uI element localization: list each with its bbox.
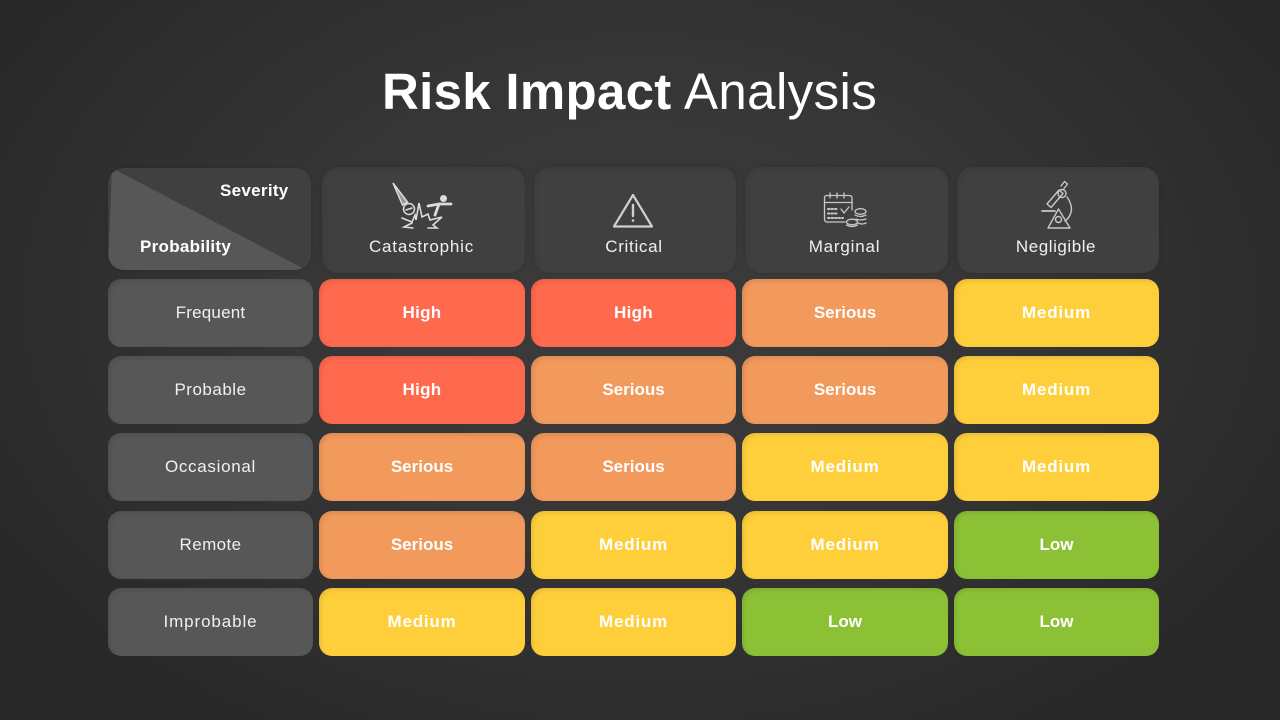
- column header: critical: Critical: [605, 237, 663, 256]
- cell: remote marginal: Medium: [810, 535, 880, 554]
- icon: warning triangle: [612, 194, 654, 228]
- column header: negligible: Negligible: [1016, 237, 1096, 256]
- cell: occasional catastrophic: [319, 433, 525, 501]
- title bold part: Risk Impact: [382, 63, 672, 120]
- cell: occasional marginal: [742, 433, 948, 501]
- cell: frequent critical: High: [614, 303, 653, 322]
- cell: probable negligible: [954, 356, 1159, 424]
- cell: improbable catastrophic: [319, 588, 525, 656]
- cell: probable negligible: Medium: [1022, 380, 1091, 399]
- cell: remote negligible: [954, 511, 1159, 579]
- column header: catastrophic: [322, 167, 525, 273]
- cell: improbable negligible: [954, 588, 1159, 656]
- icon: explosion and falling person: [392, 182, 452, 229]
- column header: critical: [534, 167, 736, 273]
- cell: improbable critical: [531, 588, 736, 656]
- cell: improbable marginal: Low: [828, 612, 862, 631]
- row: improbable: [108, 588, 313, 656]
- title: [382, 63, 877, 120]
- cell: frequent negligible: [954, 279, 1159, 347]
- icon: microscope: [1041, 180, 1072, 229]
- cell: probable catastrophic: [319, 356, 525, 424]
- panel: risk matrix: [108, 167, 1159, 656]
- row: remote: [108, 511, 313, 579]
- cell: frequent marginal: Serious: [814, 303, 876, 322]
- row: frequent: Frequent: [176, 303, 245, 322]
- row: remote: Remote: [180, 535, 241, 554]
- cell: frequent negligible: Medium: [1022, 303, 1091, 322]
- corner header: severity and probability: [108, 168, 311, 270]
- cell: occasional critical: Serious: [602, 457, 665, 476]
- cell: probable critical: [531, 356, 736, 424]
- cell: remote critical: Medium: [599, 535, 668, 554]
- cell: occasional critical: [531, 433, 736, 501]
- row: probable: [108, 356, 313, 424]
- cell: improbable catastrophic: Medium: [387, 612, 457, 631]
- cell: remote negligible: Low: [1040, 535, 1074, 554]
- cell: probable critical: Serious: [602, 380, 665, 399]
- cell: occasional catastrophic: Serious: [391, 457, 453, 476]
- cell: remote catastrophic: [319, 511, 525, 579]
- row: occasional: Occasional: [165, 457, 256, 476]
- corner header: severity and probability: Severity: [220, 181, 289, 200]
- cell: remote critical: [531, 511, 736, 579]
- row: frequent: [108, 279, 313, 347]
- cell: occasional marginal: Medium: [810, 457, 880, 476]
- cell: improbable marginal: [742, 588, 948, 656]
- row: occasional: [108, 433, 313, 501]
- column header: marginal: Marginal: [809, 237, 880, 256]
- cell: frequent catastrophic: [319, 279, 525, 347]
- icon: calendar and coins: [824, 192, 867, 228]
- cell: frequent marginal: [742, 279, 948, 347]
- cell: frequent catastrophic: High: [403, 303, 441, 322]
- cell: remote marginal: [742, 511, 948, 579]
- cell: improbable negligible: Low: [1040, 612, 1074, 631]
- cell: remote catastrophic: Serious: [391, 535, 453, 554]
- column header: negligible: [957, 167, 1159, 273]
- cell: probable marginal: [742, 356, 948, 424]
- row: probable: Probable: [174, 380, 247, 399]
- title regular part: Analysis: [684, 63, 877, 120]
- cell: probable marginal: Serious: [814, 380, 876, 399]
- row: improbable: Improbable: [163, 612, 258, 631]
- corner header: severity and probability: Probability: [140, 237, 231, 256]
- cell: frequent critical: [531, 279, 736, 347]
- column header: catastrophic: Catastrophic: [369, 237, 474, 256]
- cell: probable catastrophic: High: [403, 380, 441, 399]
- column header: marginal: [745, 167, 948, 273]
- cell: occasional negligible: [954, 433, 1159, 501]
- cell: improbable critical: Medium: [599, 612, 668, 631]
- cell: occasional negligible: Medium: [1022, 457, 1091, 476]
